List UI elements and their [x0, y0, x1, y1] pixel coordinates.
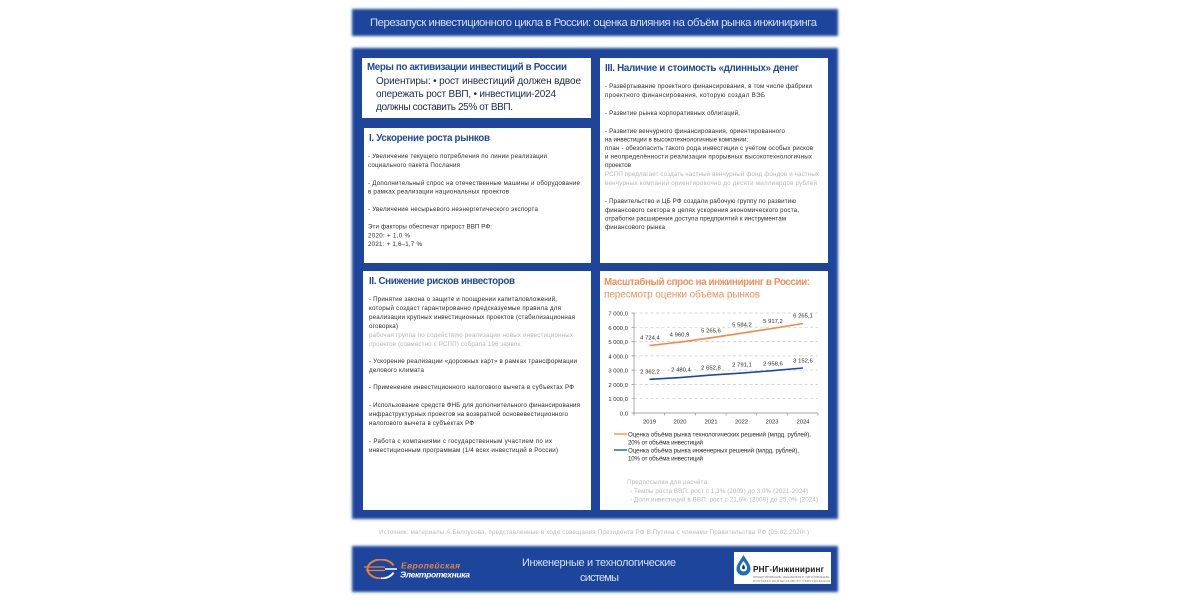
panel: investment activation measures — [362, 58, 591, 118]
text block: investor risks: проектов (совместно с РСПП) собрала 196 заявок. — [369, 341, 522, 348]
y axis labels: 2 000,0 — [608, 383, 629, 389]
data labels: technology: 6 265,1 — [793, 314, 813, 320]
text block: market growth: 2020: + 1,0 % — [368, 232, 410, 240]
heading: measures: Меры по активизации инвестиций в России — [367, 62, 567, 73]
y axis labels — [608, 312, 629, 418]
text block: investor risks: инвестиционным программам (1/4 всех инвестиций в России) — [369, 447, 558, 454]
text block: investor risks: - Работа с компаниями с государственным участием по их — [369, 438, 553, 445]
y axis labels: 4 000,0 — [608, 354, 629, 360]
text block: market growth: социального пакета Послания — [368, 162, 460, 169]
title bar — [352, 9, 838, 36]
footer caption: системы — [580, 572, 619, 584]
text block: investor risks: - Ускорение реализации «дорожных карт» в рамках трансформации — [369, 358, 578, 365]
panel: III long money — [600, 58, 828, 263]
legend — [614, 432, 811, 462]
x axis labels: 2022 — [735, 420, 748, 426]
text block: calculation assumptions — [627, 479, 818, 504]
text block: long money: проектного финансирования, которую создал ВЭБ — [605, 92, 765, 99]
text block: market growth — [368, 153, 581, 248]
logo text: European Electrotechnics: Электротехника — [400, 570, 470, 580]
text block: long money: план - обезопасить такого рода инвестиции с учётом особых рисков — [605, 145, 814, 152]
y axis labels: 7 000,0 — [608, 312, 629, 318]
text block: targets: опережать рост ВВП, • инвестиции-2024 — [376, 89, 556, 100]
x axis labels: 2021 — [704, 420, 718, 426]
data labels: engineering: 2 652,8 — [701, 366, 722, 372]
heading: engineering demand — [604, 277, 810, 300]
icon: European Electrotechnics logo — [364, 560, 397, 578]
panel: engineering demand chart — [600, 271, 828, 510]
text block: calculation assumptions: Предпосылки для расчёта: — [627, 479, 709, 486]
y axis labels: 1 000,0 — [608, 397, 629, 403]
text block: long money: - Развитие рынка корпоративных облигаций, — [605, 110, 740, 117]
x axis labels: 2019 — [643, 420, 656, 426]
legend: 10% от объёма инвестиций — [628, 456, 704, 462]
text block: market growth: - Увеличение несырьевого неэнергетического экспорта — [368, 206, 539, 213]
data labels: technology: 5 584,2 — [732, 322, 752, 328]
text block: investor risks: который создаст гарантированно предсказуемые правила для — [369, 305, 561, 312]
text block: investor risks: делового климата — [369, 367, 425, 374]
logo: RNG Engineering: ПРОЕКТИРОВАНИЕ, ИНЖИНИРИНГ, ИЗГОТОВЛЕНИЕ, — [753, 575, 830, 579]
text block: investor risks: налогового вычета в субъектах РФ — [369, 420, 474, 427]
panel: II investor risks — [363, 271, 591, 510]
text block: investor risks: рабочая группа по содействию реализации новых инвестиционных — [369, 332, 574, 339]
text block: investor risks: - Принятие закона о защите и поощрении капиталовложений, — [369, 296, 557, 303]
text block: long money: - Правительство и ЦБ РФ создали рабочую группу по развитию — [605, 198, 796, 205]
data labels: technology: 5 917,2 — [763, 319, 783, 325]
text block: market growth: 2021: + 1,6–1,7 % — [368, 241, 422, 248]
data labels: engineering: 2 362,2 — [640, 370, 660, 376]
panel: I market growth — [364, 128, 591, 263]
text block: investor risks: оговорка) — [369, 323, 398, 330]
y axis labels: 6 000,0 — [608, 326, 629, 332]
y axis labels: 0,0 — [620, 412, 629, 418]
text block: market growth: - Дополнительный спрос на отечественные машины и оборудование — [368, 180, 581, 187]
footer caption — [522, 557, 676, 584]
data labels: technology — [640, 314, 813, 342]
data labels: engineering: 2 791,1 — [732, 362, 752, 368]
footer bar — [352, 546, 838, 592]
legend: Оценка объёма рынка технологических решений (млрд. рублей), — [628, 432, 811, 438]
logo text: European Electrotechnics: Европейская — [401, 560, 460, 570]
text block: investor risks — [369, 296, 580, 454]
line: engineering solutions — [650, 368, 803, 379]
text block: long money: проектов — [605, 162, 632, 169]
data labels: engineering — [640, 358, 814, 376]
text block: long money: финансового рынка — [605, 224, 666, 231]
x axis labels — [643, 420, 810, 426]
logo: RNG Engineering: ПОСТАВКА НЕФТЕГАЗОВОГО ОБОРУДОВАНИЯ — [753, 579, 830, 583]
text block: targets: должны составить 25% от ВВП. — [376, 102, 513, 113]
text block: targets — [376, 76, 581, 113]
text block: market growth: в рамках реализации национальных проектов — [368, 188, 510, 196]
text block: market growth: Эти факторы обеспечат прирост ВВП РФ: — [368, 224, 492, 230]
text block: long money: - Развёртывание проектного финансирования, в том числе фабрики — [605, 83, 813, 90]
logo text: European Electrotechnics — [400, 560, 470, 580]
text block: long money: отработки расширения доступа предприятий к инструментам — [605, 216, 786, 222]
logo: RNG Engineering — [734, 552, 831, 584]
footer caption: Инженерные и технологические — [522, 557, 676, 569]
legend: 20% от объёма инвестиций — [628, 440, 704, 446]
text block: long money — [605, 83, 820, 231]
text block: long money: и неопределённости реализации прорывных высокотехнологичных — [605, 154, 813, 160]
data labels: technology: 4 724,4 — [640, 336, 661, 342]
heading: I: I. Ускорение роста рынков — [369, 133, 490, 144]
text block: market growth: - Увеличение текущего потребления по линии реализации — [368, 153, 548, 160]
text block: investor risks: инфраструктурных проектов на возвратной основевестиционного — [369, 411, 569, 418]
title: Перезапуск инвестиционного цикла в России: оценка влияния на объём рынка инжиниринга — [370, 17, 818, 29]
x axis labels: 2020 — [673, 420, 687, 426]
main blue background panel — [352, 48, 838, 519]
logo: RNG Engineering: РНГ-Инжиниринг — [753, 565, 825, 574]
y axis labels: 5 000,0 — [608, 340, 629, 346]
text block: long money: РСПП предлагает создать частный венчурный фонд фондов и частных — [605, 171, 820, 178]
data labels: engineering: 3 152,6 — [793, 358, 814, 364]
text block: investor risks: - Использование средств ФНБ для дополнительного финансирования — [369, 402, 580, 409]
text block: long money: венчурных компаний ориентировочно до десяти миллиардов рублей — [605, 180, 818, 187]
text block: calculation assumptions: - Доля инвестиций в ВВП: рост с 21,6% (2009) до 25,0% (2024) — [630, 496, 818, 504]
text block: long money: на инвестиции в высокотехнологичные компании; — [605, 136, 748, 144]
source note: Источник: материалы А.Белоусова, представленные в ходе совещания Президента РФ В.Путина с членами Правительства РФ (05.02.2020г.) — [379, 529, 809, 536]
data labels: technology: 4 960,9 — [670, 332, 689, 338]
heading: III: III. Наличие и стоимость «длинных» денег — [605, 63, 799, 74]
icon: water drop — [736, 555, 750, 576]
text block: calculation assumptions: - Темпы роста ВВП: рост с 1,3% (2009) до 3,0% (2021-2024) — [630, 488, 808, 495]
line chart — [608, 312, 818, 426]
text block: long money: финансового сектора в целях ускорения экономического роста, — [605, 207, 799, 214]
x axis labels: 2023 — [765, 420, 779, 426]
data labels: engineering: 2 958,6 — [763, 362, 784, 368]
heading: engineering demand: Масштабный спрос на инжиниринг в России: — [604, 277, 810, 288]
x axis labels: 2024 — [796, 420, 810, 426]
y axis labels: 3 000,0 — [608, 369, 629, 375]
heading: engineering demand: пересмотр оценки объёма рынков — [604, 288, 760, 300]
text block: investor risks: реализации крупных инвестиционных проектов (стабилизационная — [369, 314, 575, 321]
text block: long money: - Развитие венчурного финансирования, ориентированного — [605, 128, 786, 135]
text block: investor risks: - Применение инвестиционного налогового вычета в субъектах РФ — [369, 384, 574, 391]
legend: Оценка объёма рынка инженерных решений (млрд. рублей), — [628, 448, 799, 454]
text block: targets: Ориентиры: • рост инвестиций должен вдвое — [376, 76, 581, 87]
heading: II: II. Снижение рисков инвесторов — [369, 276, 515, 287]
data labels: engineering: 2 480,4 — [671, 368, 692, 374]
data labels: technology: 5 265,6 — [701, 328, 722, 334]
line: technology solutions — [650, 324, 803, 346]
